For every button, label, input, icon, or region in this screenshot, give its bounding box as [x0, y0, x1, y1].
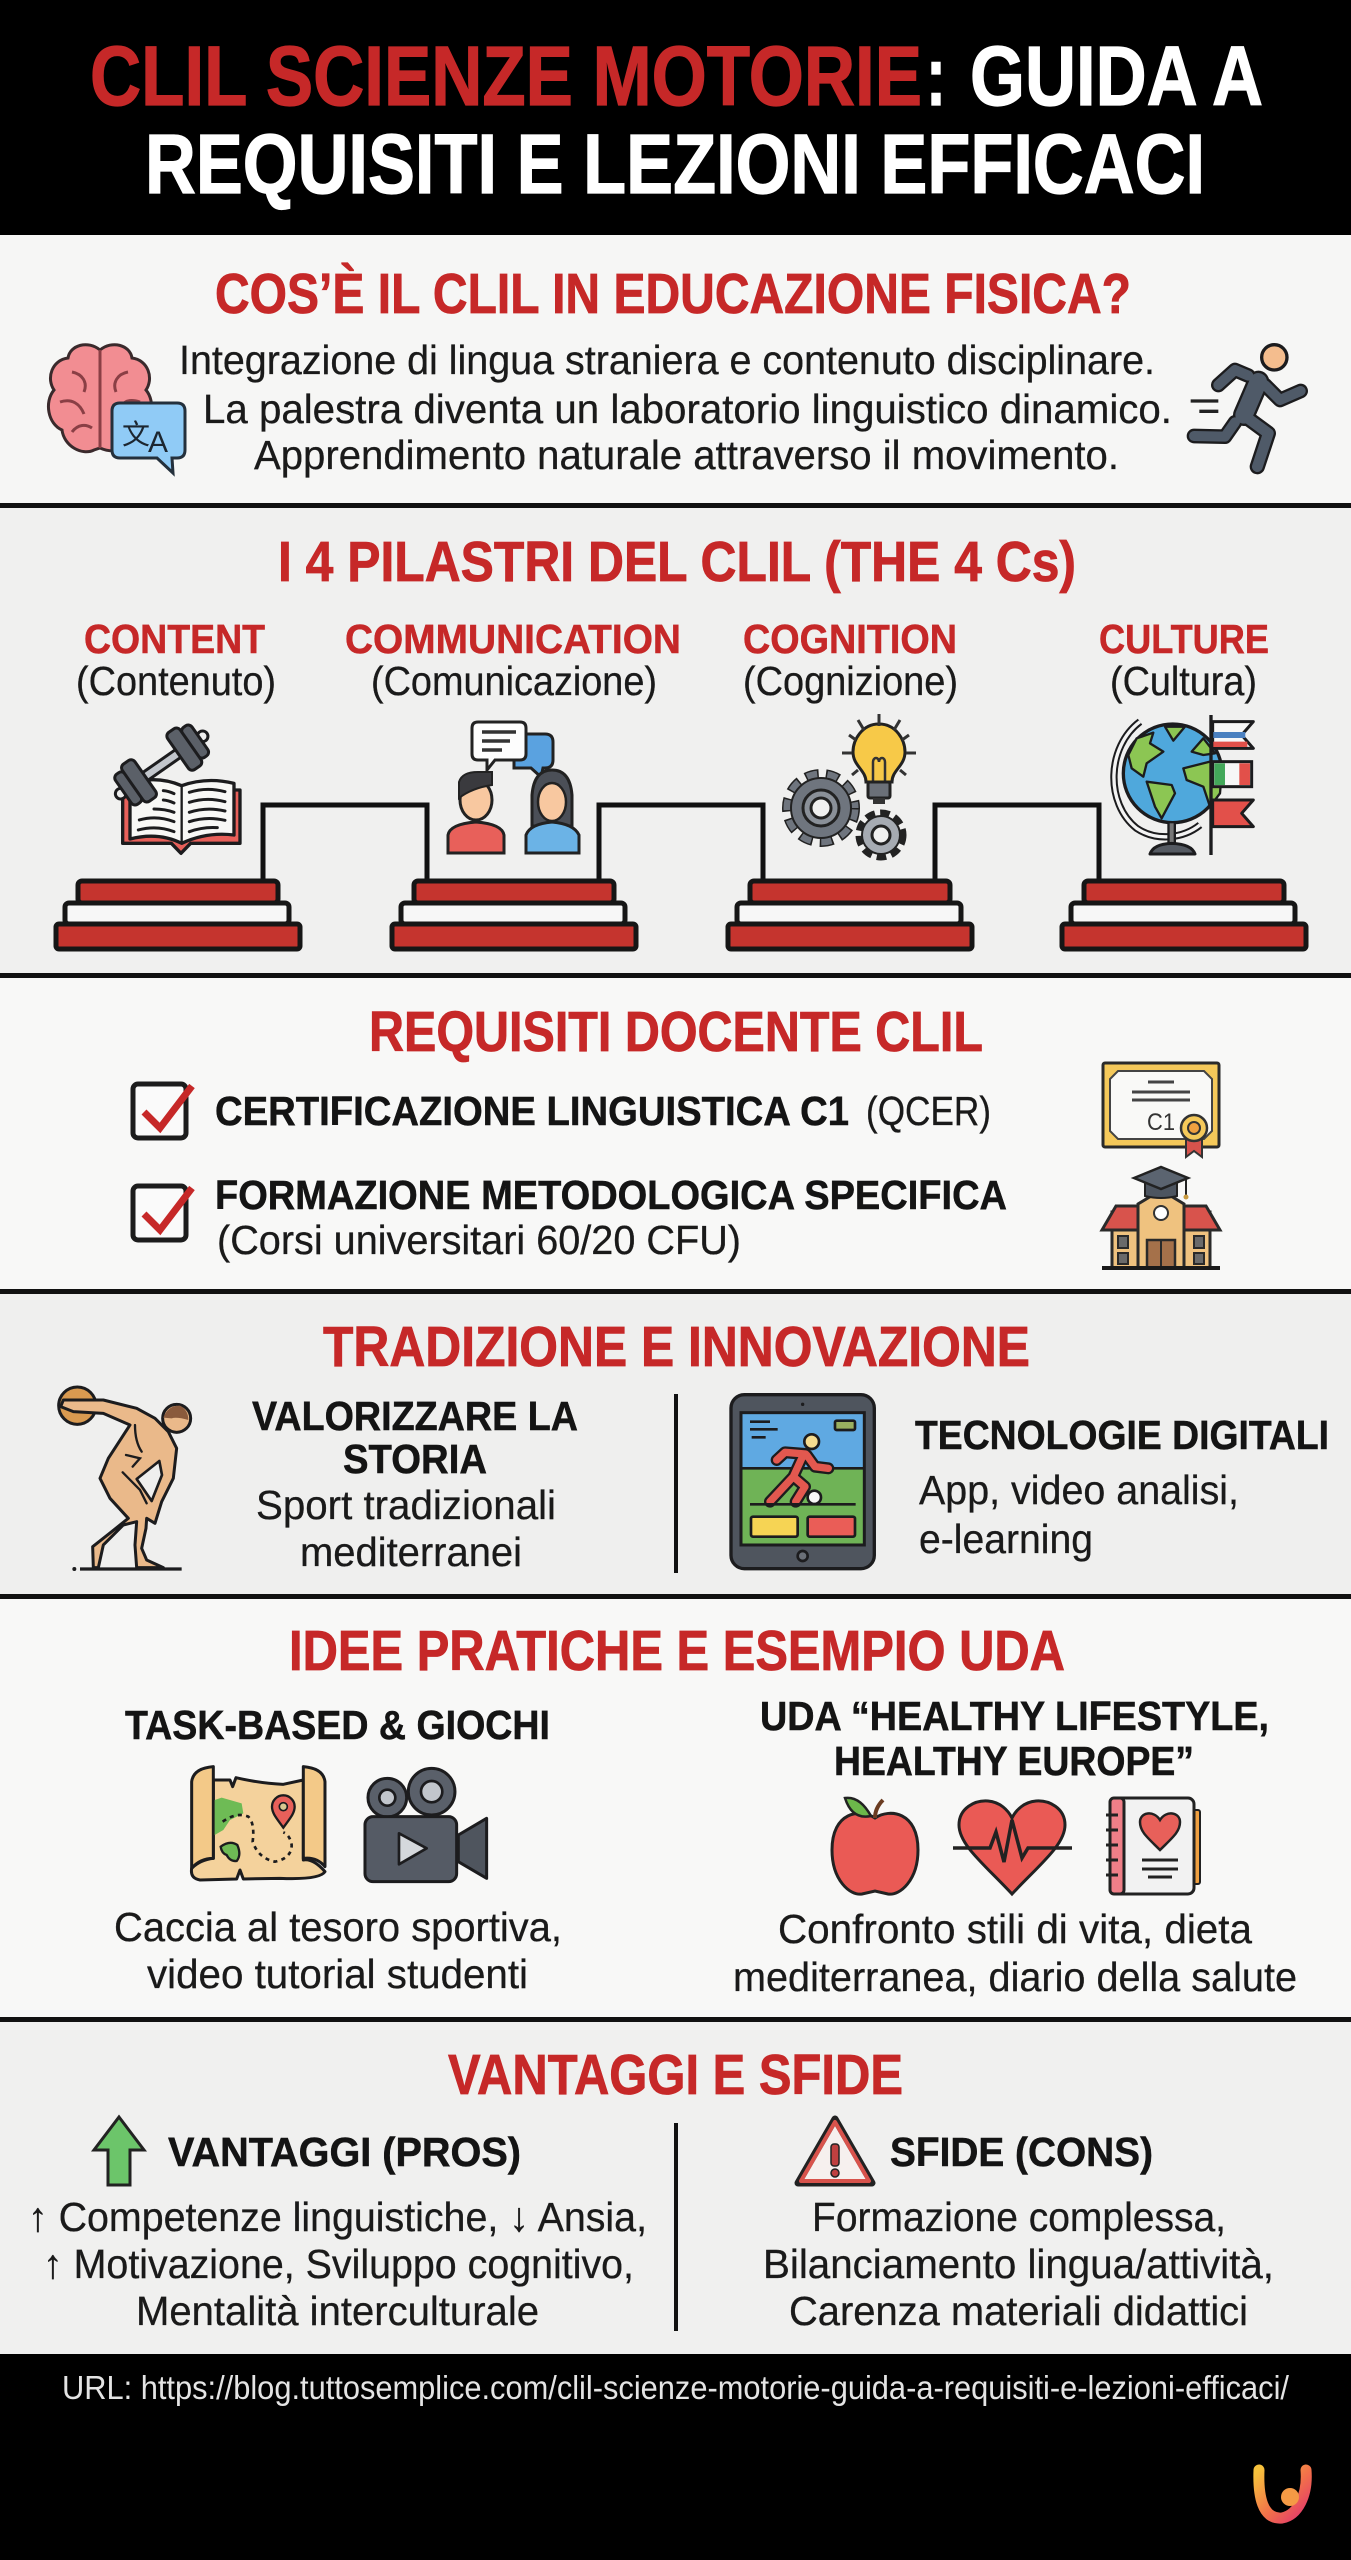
text block: tecnologie digitali	[915, 1412, 1329, 1562]
pillar labels: COGNITION	[743, 616, 957, 662]
item: certificazione linguistica: (QCER)	[866, 1088, 991, 1134]
podiums	[56, 881, 1306, 949]
item: formazione metodologica: (Corsi universitari 60/20 CFU)	[217, 1217, 741, 1263]
list: vantaggi: ↑ Motivazione, Sviluppo cognitivo,	[43, 2241, 634, 2287]
icon: brain with translation bubble: 文	[122, 413, 150, 453]
header: title	[0, 0, 1351, 235]
icon: brain with translation bubble: A	[148, 426, 168, 459]
icon: green up arrow	[94, 2117, 144, 2185]
pillar labels: (Cultura)	[1110, 658, 1257, 704]
list: sfide: Carenza materiali didattici	[789, 2288, 1248, 2334]
heading: cos'è il CLIL: COS’È IL CLIL IN EDUCAZIONE FISICA?	[215, 262, 1131, 326]
text block: valorizzare la storia: VALORIZZARE LA	[252, 1393, 578, 1439]
text block: valorizzare la storia	[252, 1393, 578, 1575]
panel: tradizione e innovazione	[0, 1294, 1351, 1599]
icon: two people talking	[448, 722, 579, 853]
icon: brain with translation bubble	[48, 345, 185, 473]
connector lines between podiums	[263, 805, 1099, 880]
text block: caccia al tesoro: video tutorial studenti	[147, 1951, 528, 1997]
text block: valorizzare la storia: mediterranei	[300, 1529, 522, 1575]
item: formazione metodologica	[133, 1172, 1007, 1263]
pillar labels: CULTURE	[1099, 616, 1269, 662]
panel: vantaggi e sfide	[0, 2022, 1351, 2354]
heading: idee pratiche: IDEE PRATICHE E ESEMPIO UDA	[289, 1619, 1065, 1683]
item: certificazione linguistica	[133, 1084, 991, 1138]
text block: confronto stili di vita: Confronto stili di vita, dieta	[778, 1906, 1252, 1952]
panel: cos'è il CLIL	[0, 235, 1351, 508]
icon: apple	[832, 1798, 918, 1894]
icon: logo	[1259, 2470, 1306, 2518]
icon: C1 certificate: C1	[1147, 1109, 1175, 1136]
text block: tecnologie digitali: App, video analisi,	[919, 1467, 1239, 1513]
pillar labels: (Cognizione)	[743, 658, 958, 704]
subheading: UDA healthy lifestyle	[760, 1693, 1269, 1784]
list: vantaggi: ↑ Competenze linguistiche, ↓ Ansia,	[28, 2194, 647, 2240]
text block: caccia al tesoro	[114, 1904, 562, 1997]
list: sfide: Bilanciamento lingua/attività,	[763, 2241, 1274, 2287]
panel: idee pratiche	[0, 1599, 1351, 2022]
list: vantaggi	[28, 2194, 647, 2334]
text block: confronto stili di vita	[733, 1906, 1297, 2000]
subheading: UDA healthy lifestyle: UDA “HEALTHY LIFESTYLE,	[760, 1693, 1269, 1739]
header: title: :	[926, 29, 946, 123]
icon: dumbbell and book	[103, 715, 240, 853]
pillar labels: (Comunicazione)	[371, 658, 657, 704]
pillar labels: COMMUNICATION	[345, 616, 681, 662]
subheading: sfide: SFIDE (CONS)	[890, 2129, 1153, 2175]
icon: treasure map	[191, 1767, 487, 1882]
icon: health diary	[1106, 1798, 1200, 1894]
icon: warning triangle	[798, 2119, 872, 2183]
header: title: GUIDA A	[970, 29, 1263, 123]
pillar labels: (Contenuto)	[76, 658, 276, 704]
text block: CLIL definition: La palestra diventa un laboratorio linguistico dinamico.	[203, 386, 1172, 432]
pillar labels: CONTENT	[84, 616, 265, 662]
icon: tablet with player	[731, 1395, 874, 1569]
icon: heart with pulse	[953, 1801, 1072, 1894]
text block: valorizzare la storia: Sport tradizionali	[256, 1482, 556, 1528]
text block: CLIL definition	[179, 337, 1172, 478]
subheading: vantaggi: VANTAGGI (PROS)	[168, 2129, 521, 2175]
heading: 4 pilastri: I 4 PILASTRI DEL CLIL (THE 4 Cs)	[278, 530, 1076, 594]
pillar labels	[76, 616, 1269, 704]
icon: university building	[1102, 1167, 1220, 1268]
text block: tecnologie digitali: e-learning	[919, 1516, 1093, 1562]
header: title: CLIL SCIENZE MOTORIE	[90, 29, 922, 123]
icon: C1 certificate	[1103, 1063, 1219, 1157]
icon: gears and lightbulb	[788, 714, 916, 856]
text block: CLIL definition: Integrazione di lingua straniera e contenuto disciplinare.	[179, 337, 1155, 383]
panel: requisiti docente	[0, 978, 1351, 1294]
text block: confronto stili di vita: mediterranea, diario della salute	[733, 1954, 1297, 2000]
list: sfide: Formazione complessa,	[812, 2194, 1226, 2240]
text block: CLIL definition: Apprendimento naturale attraverso il movimento.	[254, 432, 1119, 478]
item: certificazione linguistica: CERTIFICAZIONE LINGUISTICA C1	[215, 1088, 849, 1134]
icon: discobolus statue	[59, 1387, 191, 1571]
subheading: task-based: TASK-BASED & GIOCHI	[125, 1702, 550, 1748]
panel: 4 pilastri	[0, 508, 1351, 978]
icon: globe and flags	[1114, 715, 1253, 855]
heading: requisiti docente: REQUISITI DOCENTE CLIL	[369, 1000, 983, 1064]
text block: valorizzare la storia: STORIA	[343, 1436, 487, 1482]
text block: caccia al tesoro: Caccia al tesoro sportiva,	[114, 1904, 562, 1950]
icon: runner	[1191, 345, 1301, 467]
subheading: UDA healthy lifestyle: HEALTHY EUROPE”	[834, 1738, 1194, 1784]
heading: tradizione e innovazione: TRADIZIONE E INNOVAZIONE	[323, 1315, 1030, 1379]
list: sfide	[763, 2194, 1274, 2334]
heading: vantaggi e sfide: VANTAGGI E SFIDE	[448, 2043, 903, 2107]
list: vantaggi: Mentalità interculturale	[136, 2288, 539, 2334]
footer: source URL: URL: https://blog.tuttosemplice.com/clil-scienze-motorie-guida-a-requisiti-e-lezioni-efficaci/	[62, 2369, 1290, 2406]
item: formazione metodologica: FORMAZIONE METODOLOGICA SPECIFICA	[215, 1172, 1007, 1218]
